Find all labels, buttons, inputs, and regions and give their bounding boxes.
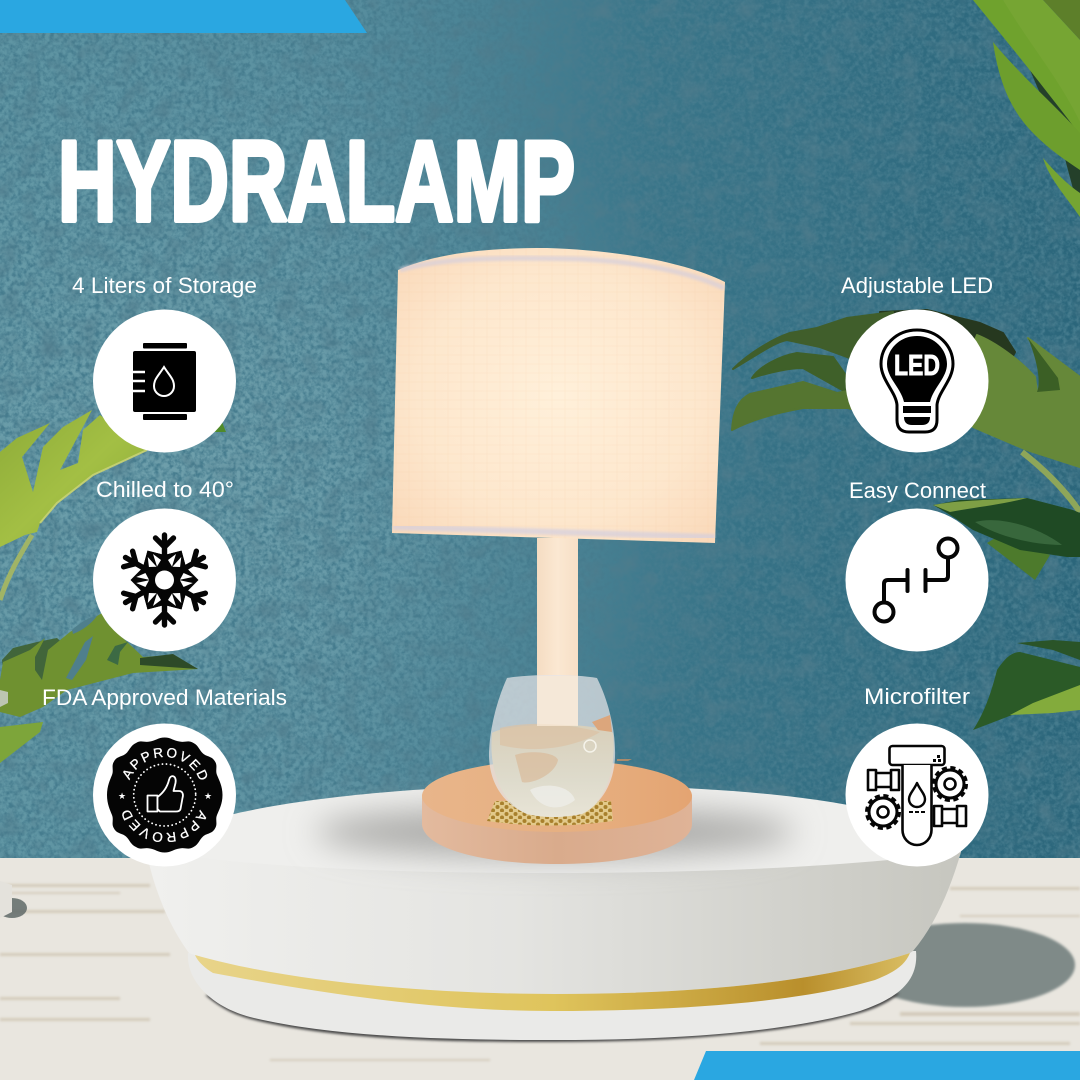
icon circle bbox=[93, 310, 236, 452]
icon circle bbox=[846, 310, 988, 452]
plant: right lower leaf bbox=[973, 640, 1080, 730]
plant: right glossy dark leaf bbox=[933, 498, 1080, 580]
gold band bbox=[195, 953, 910, 1011]
feature: microfilter bbox=[846, 684, 988, 866]
feature: easy connect bbox=[846, 478, 988, 652]
bottom blue banner bbox=[694, 1051, 1080, 1080]
icon circle bbox=[846, 724, 988, 866]
plant: top-right monstera leaf bbox=[973, 0, 1080, 217]
icon: approved badge bbox=[107, 738, 222, 852]
lamp: stem bbox=[537, 538, 578, 728]
icon: filter with gears bbox=[867, 746, 966, 845]
lamp: fabric shade bbox=[392, 248, 725, 543]
label: Chilled to 40° bbox=[96, 477, 234, 502]
floor: white wood planks bbox=[0, 858, 1080, 1080]
feature: 4 liters of storage bbox=[72, 273, 257, 452]
label: Microfilter bbox=[864, 684, 970, 709]
background: stone wall bbox=[0, 0, 1080, 860]
pedestal: white round table with gold band bbox=[146, 785, 961, 1042]
saucer bbox=[188, 951, 916, 1042]
thumbs up bbox=[148, 776, 183, 812]
small white object at left edge bbox=[0, 881, 27, 918]
icon circle bbox=[93, 724, 236, 866]
lamp: glass with water bbox=[489, 675, 615, 817]
label: FDA Approved Materials bbox=[42, 685, 287, 710]
top surface bbox=[146, 785, 961, 873]
title: HYDRALAMP bbox=[58, 118, 575, 246]
label: 4 Liters of Storage bbox=[72, 273, 257, 298]
icon: LED bulb bbox=[881, 330, 953, 432]
stars: ★ bbox=[118, 792, 126, 802]
icon: water tank bbox=[133, 343, 196, 420]
top blue banner bbox=[0, 0, 367, 33]
feature: FDA approved materials bbox=[42, 685, 287, 866]
icon circle bbox=[93, 508, 236, 652]
plant: left lower monstera leaf bbox=[0, 613, 198, 763]
lamp: wooden base bbox=[422, 759, 692, 864]
plant: right leaf stem bbox=[1022, 452, 1080, 512]
lamp: gold honeycomb mesh plate bbox=[487, 801, 613, 826]
badge text: APPROVED bbox=[123, 748, 208, 780]
feature: chilled to 40 bbox=[93, 477, 236, 652]
star right: ★ bbox=[204, 792, 212, 802]
label: Adjustable LED bbox=[841, 273, 993, 298]
icon: snowflake bbox=[121, 535, 208, 625]
badge text bottom: APPROVED bbox=[122, 810, 206, 842]
icon circle bbox=[846, 508, 988, 652]
floor shadow of pedestal bbox=[855, 923, 1075, 1007]
icon: LED bulb: LED bbox=[894, 350, 940, 382]
plant: right large leaf behind LED circle bbox=[732, 310, 1080, 467]
icon: connector bbox=[874, 538, 958, 622]
plant: left upper monstera leaf bbox=[0, 410, 226, 600]
label: Easy Connect bbox=[849, 478, 986, 503]
body bbox=[146, 850, 961, 994]
scalloped seal bbox=[107, 738, 222, 852]
feature: adjustable LED bbox=[841, 273, 993, 452]
shadow on top surface bbox=[315, 806, 795, 858]
